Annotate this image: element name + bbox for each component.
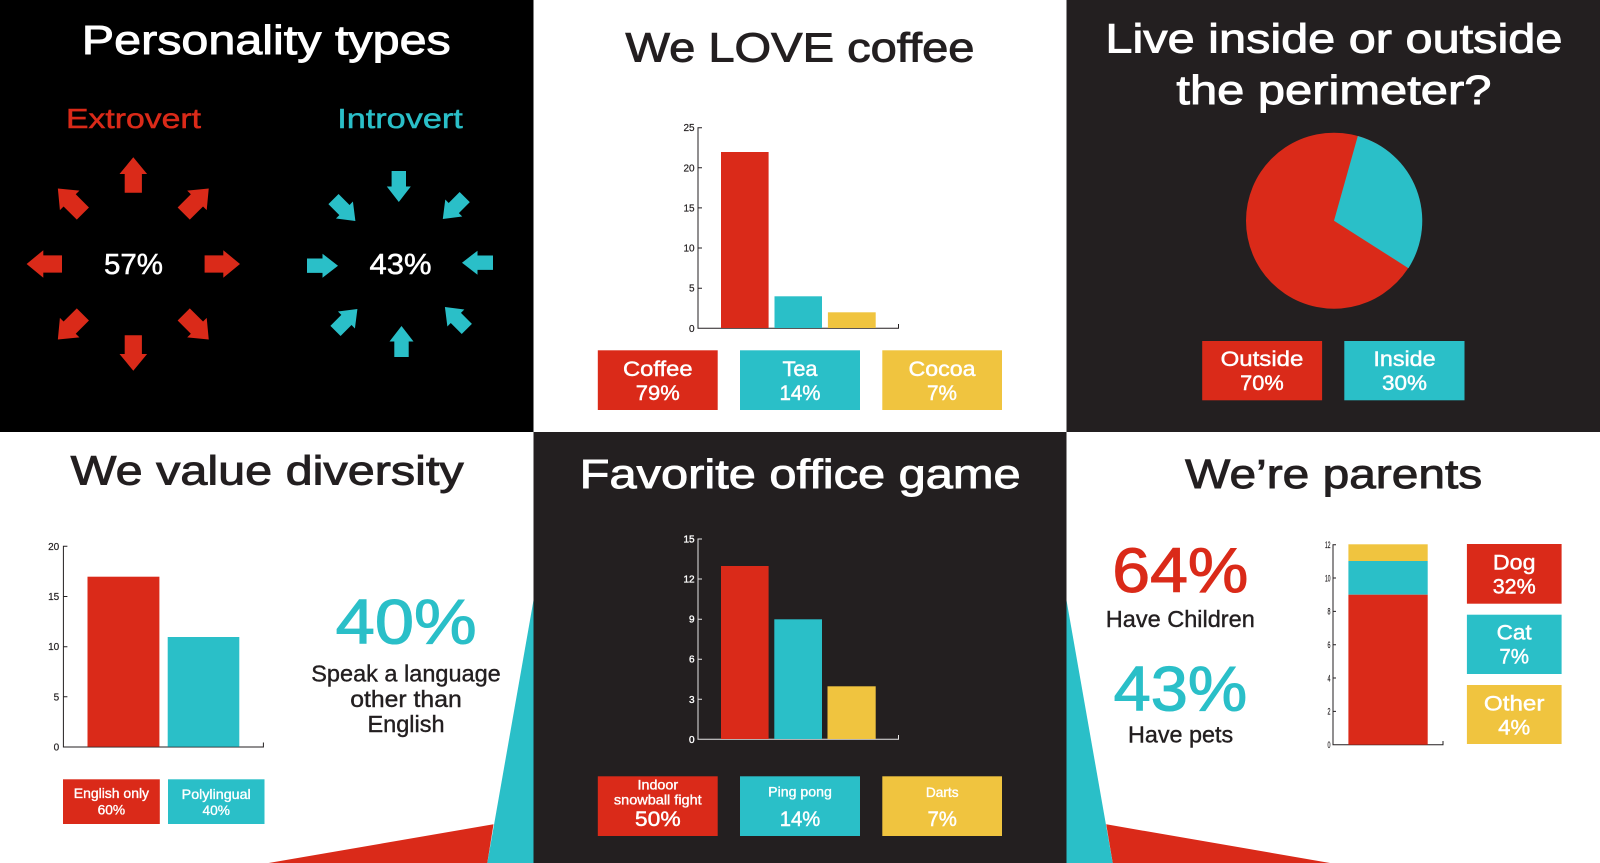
stat: 64% have children: Have Children xyxy=(1106,606,1255,632)
stacked bar chart: pets: 6 xyxy=(1328,640,1330,650)
legend: inside 30%: Inside xyxy=(1373,347,1436,371)
label: extrovert: Extrovert xyxy=(66,103,201,134)
heading: we value diversity: We value diversity xyxy=(71,448,464,494)
legend: ping pong 14%: 14% xyxy=(780,807,820,831)
stat: 40% speak another language: 40% xyxy=(336,588,477,658)
legend: inside 30%: 30% xyxy=(1382,371,1427,395)
legend: dog 32%: Dog xyxy=(1493,550,1535,574)
heading: live inside or outside the perimeter xyxy=(1105,16,1562,113)
legend: cat 7%: 7% xyxy=(1499,645,1529,669)
bar chart: coffee, tea, cocoa: 25 xyxy=(683,123,695,134)
icon: extrovert arrows pointing outward xyxy=(27,157,240,371)
bar chart: english only and polylingual: 15 xyxy=(48,592,60,603)
panel: parents xyxy=(1066,432,1600,863)
legend: tea 14%: 14% xyxy=(780,381,820,405)
legend: darts 7% xyxy=(882,776,1002,836)
stat: 40% speak another language: English xyxy=(368,711,444,737)
stacked bar chart: pets: 12 xyxy=(1325,540,1330,550)
stacked bar chart: pets: 10 xyxy=(1325,573,1330,583)
bar chart: snowball fight, ping pong, darts: 0 xyxy=(689,735,695,746)
bar chart: coffee, tea, cocoa: 5 xyxy=(689,284,695,295)
stat: 40% speak another language: other than xyxy=(350,686,462,712)
bar chart: english only and polylingual: 5 xyxy=(54,692,60,703)
legend: polylingual 40% xyxy=(168,779,264,824)
legend: english only 60% xyxy=(63,779,160,824)
legend: darts 7%: 7% xyxy=(927,807,957,831)
bar chart: snowball fight, ping pong, darts: 9 xyxy=(689,615,695,626)
heading: favorite office game: Favorite office game xyxy=(580,451,1021,497)
panel: personality types xyxy=(0,0,534,432)
decoration: red wedge xyxy=(1106,824,1330,863)
bar chart: coffee, tea, cocoa: 20 xyxy=(683,163,695,174)
bar chart: snowball fight, ping pong, darts: 6 xyxy=(689,655,695,666)
heading: live inside or outside the perimeter: Live inside or outside xyxy=(1105,16,1562,62)
bar chart: coffee, tea, cocoa: 15 xyxy=(683,203,695,214)
legend: outside 70%: 70% xyxy=(1240,371,1284,395)
legend: english only 60%: 60% xyxy=(98,801,125,817)
legend: ping pong 14% xyxy=(740,776,860,836)
bar chart: snowball fight, ping pong, darts: 12 xyxy=(683,574,695,586)
legend: indoor snowball fight 50%: snowball fight xyxy=(614,792,702,808)
legend: tea 14% xyxy=(740,350,860,410)
icon: introvert arrows pointing inward xyxy=(307,171,493,357)
stacked bar chart: pets: 4 xyxy=(1328,673,1330,683)
legend: inside 30% xyxy=(1344,341,1464,400)
bar chart: english only and polylingual: 0 xyxy=(54,742,60,754)
legend: polylingual 40%: 40% xyxy=(202,802,230,818)
bar chart: coffee, tea, cocoa: 0 xyxy=(689,324,695,335)
stat: 64% have children xyxy=(1106,536,1255,632)
stat: 40% speak another language: Speak a language xyxy=(311,660,501,686)
legend: polylingual 40%: Polylingual xyxy=(182,786,251,802)
bar chart: coffee, tea, cocoa xyxy=(683,123,898,335)
legend: coffee 79%: 79% xyxy=(636,381,680,405)
bar chart: snowball fight, ping pong, darts xyxy=(683,534,898,746)
bar chart: english only and polylingual xyxy=(48,542,263,754)
stacked bar chart: pets: 0 xyxy=(1328,740,1330,750)
legend: cocoa 7%: Cocoa xyxy=(908,357,976,381)
legend: indoor snowball fight 50% xyxy=(598,776,718,836)
stacked bar chart: pets: 8 xyxy=(1328,607,1330,617)
heading: live inside or outside the perimeter: the perimeter? xyxy=(1176,67,1491,113)
heading: personality types: Personality types xyxy=(82,17,451,63)
legend: dog 32% xyxy=(1467,544,1562,604)
stat: 64% have children: 64% xyxy=(1112,536,1248,606)
bar chart: english only and polylingual: 10 xyxy=(48,642,60,653)
label: introvert: Introvert xyxy=(337,103,463,134)
panel: office game xyxy=(534,432,1066,863)
pie chart: outside 70%, inside 30% xyxy=(1246,133,1422,309)
legend: indoor snowball fight 50%: Indoor xyxy=(638,776,678,792)
stat: 43% have pets: Have pets xyxy=(1128,722,1233,748)
legend: dog 32%: 32% xyxy=(1493,575,1536,599)
bar chart: snowball fight, ping pong, darts: 15 xyxy=(683,534,695,546)
legend: indoor snowball fight 50%: 50% xyxy=(635,807,681,831)
legend: coffee 79%: Coffee xyxy=(623,357,693,381)
legend: other 4% xyxy=(1467,685,1562,744)
legend: cocoa 7% xyxy=(882,350,1002,410)
decoration: red wedge xyxy=(269,824,494,863)
decoration: teal wedge xyxy=(1066,600,1113,863)
legend: darts 7%: Darts xyxy=(926,784,959,800)
decoration: teal wedge xyxy=(487,600,534,863)
stacked bar chart: pets xyxy=(1325,540,1443,750)
panel: diversity xyxy=(0,432,534,863)
bar chart: english only and polylingual: 20 xyxy=(48,542,60,553)
panel: coffee xyxy=(534,0,1066,432)
legend: ping pong 14%: Ping pong xyxy=(768,784,832,800)
legend: tea 14%: Tea xyxy=(782,357,818,381)
value: introvert 43%: 43% xyxy=(370,249,432,281)
stat: 43% have pets: 43% xyxy=(1114,654,1247,724)
bar chart: snowball fight, ping pong, darts: 3 xyxy=(689,695,695,706)
legend: outside 70%: Outside xyxy=(1221,347,1303,371)
stat: 40% speak another language xyxy=(311,588,501,737)
legend: cocoa 7%: 7% xyxy=(927,381,957,405)
legend: english only 60%: English only xyxy=(74,785,149,801)
heading: we love coffee: We LOVE coffee xyxy=(626,25,974,71)
legend: cat 7% xyxy=(1467,615,1562,674)
legend: coffee 79% xyxy=(598,350,718,410)
bar chart: coffee, tea, cocoa: 10 xyxy=(683,244,695,254)
legend: outside 70% xyxy=(1202,341,1322,400)
panel: perimeter xyxy=(1066,0,1600,432)
legend: cat 7%: Cat xyxy=(1497,621,1532,645)
legend: other 4%: 4% xyxy=(1498,715,1530,739)
value: extrovert 57%: 57% xyxy=(104,249,163,281)
stacked bar chart: pets: 2 xyxy=(1328,707,1330,717)
legend: other 4%: Other xyxy=(1484,691,1544,715)
heading: we're parents: We’re parents xyxy=(1185,451,1482,497)
